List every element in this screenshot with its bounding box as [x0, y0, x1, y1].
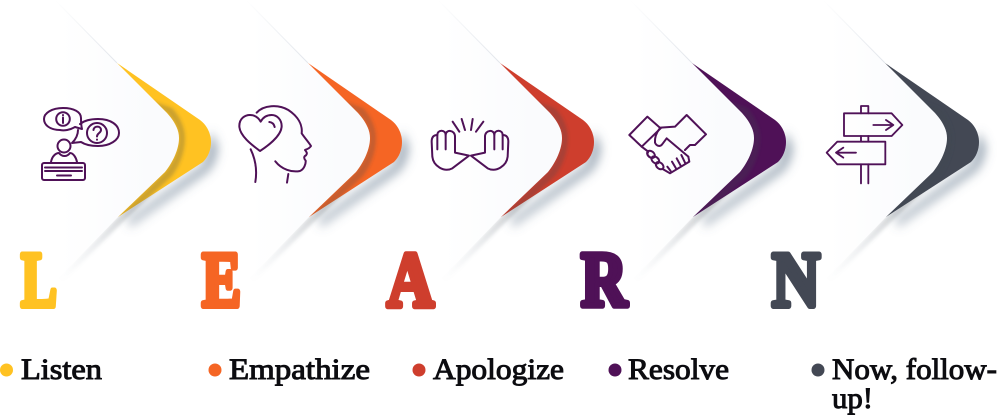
panel: E chevron: [246, 0, 409, 284]
letter E: E: [202, 236, 241, 323]
panel: R chevron: [630, 0, 793, 284]
letter A: A: [387, 236, 434, 323]
panel: A chevron: [438, 0, 601, 284]
label: Listen: Listen: [21, 353, 102, 386]
icon: head with heart: [239, 106, 311, 183]
icon: handshake: [629, 115, 706, 173]
label: Now, follow-up!: up!: [832, 382, 873, 415]
label: Resolve: Resolve: [628, 353, 729, 386]
icon: raised hands: [432, 119, 508, 170]
panel: L chevron: [55, 0, 218, 284]
label: Apologize: Apologize: [433, 353, 564, 386]
icon: listening person with speech bubbles: [42, 108, 119, 180]
letter R: R: [581, 236, 628, 323]
letter N: N: [772, 236, 820, 323]
label: Empathize: Empathize: [229, 353, 370, 386]
panel: N chevron: [823, 0, 986, 284]
label: Now, follow-up!: [812, 353, 997, 415]
label: Now, follow-up!: Now, follow-: [832, 353, 997, 386]
letter L: L: [21, 236, 57, 323]
icon: signpost: [827, 106, 902, 183]
